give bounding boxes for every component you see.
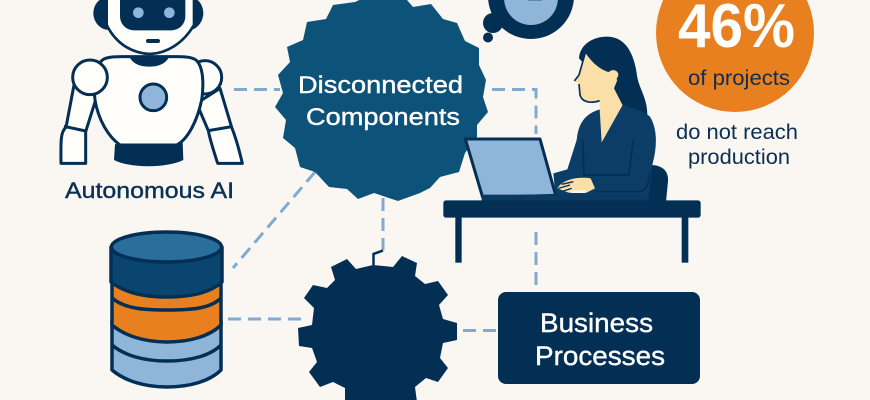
panel: business processes [498,292,700,384]
icon: database stack [111,232,222,387]
laptop [465,139,556,197]
robot hip [114,143,183,166]
body [553,105,656,200]
robot chest light [140,84,167,111]
ear tuft [608,70,618,80]
robot left arm [61,83,97,163]
robot visor [120,0,185,43]
hair [579,37,647,115]
robot head [107,0,194,54]
robot right shoulder [188,61,222,94]
top ellipse [112,232,222,262]
dark layer [111,247,222,297]
icon: gear [298,250,457,400]
robot collar [129,57,169,67]
icon: robot [61,0,242,166]
text: do not reach production [676,121,798,169]
icon: woman at laptop [443,37,701,263]
badge label: Disconnected [298,72,463,99]
desk [443,200,701,263]
panel: disconnected components badge [275,0,488,201]
robot left shoulder [73,60,107,95]
orange layer [112,275,221,342]
hand [557,178,595,193]
robot right arm [197,88,242,163]
badge label [298,72,463,131]
panel: business processes: Business [540,308,653,338]
laptop base [482,195,648,201]
robot ears [93,0,203,30]
blue layer [112,320,221,387]
text: do not reach production: production [688,146,790,169]
dashed connectors [228,90,536,330]
face and neck [574,53,623,142]
chair [647,165,668,202]
callout: 46% of projects [656,0,814,112]
text: do not reach production: do not reach [676,121,798,144]
label: Autonomous AI: Autonomous AI [65,178,234,203]
callout: 46% of projects: of projects [688,67,790,90]
robot torso [94,57,203,145]
badge label: Components [306,104,460,131]
icon: thought bubble [483,0,574,42]
panel: business processes: Processes [535,341,665,371]
